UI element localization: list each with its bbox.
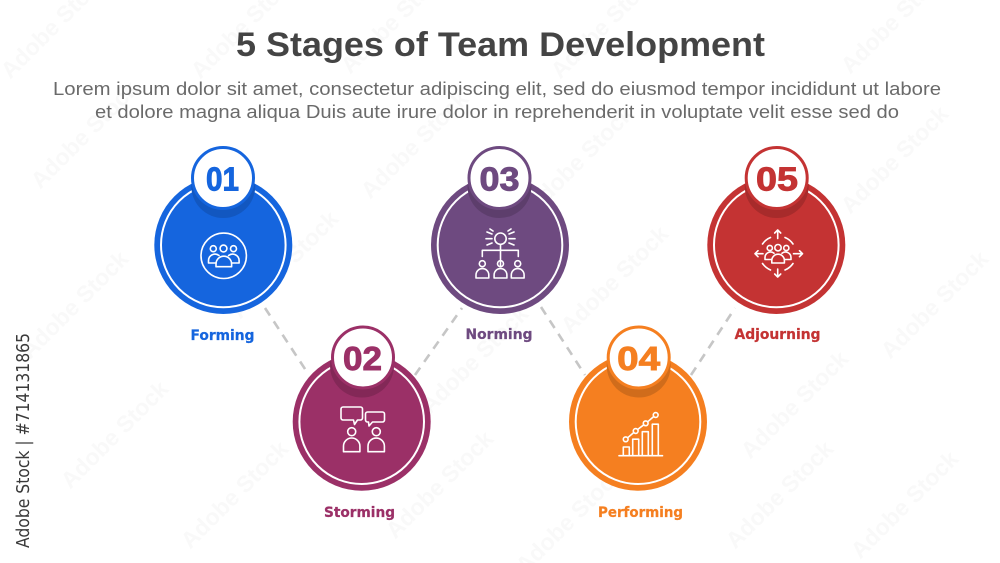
label: adjourning: Adjourning xyxy=(734,327,820,343)
stage 4: performing xyxy=(569,327,707,521)
background watermark: Adobe Stock xyxy=(845,445,963,563)
icon: leader and team hierarchy xyxy=(476,229,524,278)
icon: team in circle xyxy=(201,233,246,278)
stage 4: performing: 04 xyxy=(617,340,661,377)
stage 3: norming: 03 xyxy=(480,160,520,198)
label: storming: Storming xyxy=(324,505,395,521)
background watermark: Adobe Stock xyxy=(15,245,133,363)
label: norming: Norming xyxy=(466,327,532,343)
icon: team with outward arrows xyxy=(755,230,802,277)
background watermark: Adobe Stock xyxy=(225,205,343,323)
title: 5 Stages of Team Development xyxy=(236,26,765,64)
background watermark: Adobe Stock xyxy=(175,435,293,553)
stage 5: adjourning: 05 xyxy=(756,160,798,198)
stock credit: Adobe Stock | #714131865 xyxy=(13,333,34,548)
background watermark: Adobe Stock xyxy=(735,345,853,463)
background watermark: Adobe Stock xyxy=(380,425,498,543)
background watermark: Adobe Stock xyxy=(720,435,838,553)
stage 2: storming xyxy=(293,327,431,521)
background watermark: Adobe Stock xyxy=(520,100,638,218)
dashed connectors xyxy=(265,307,735,375)
background watermark: Adobe Stock xyxy=(55,375,173,493)
subtitle: Lorem ipsum dolor sit amet, consectetur adipiscing elit, sed do eiusmod tempor incididunt ut labore xyxy=(53,79,941,99)
stage 2: storming: 02 xyxy=(343,340,382,377)
icon: two people talking xyxy=(341,407,384,452)
background watermark: Adobe Stock xyxy=(875,245,993,363)
stage 3: norming xyxy=(431,148,569,343)
background watermark: Adobe Stock xyxy=(835,100,953,218)
subtitle: et dolore magna aliqua Duis aute irure dolor in reprehenderit in voluptate velit esse sed do xyxy=(95,102,899,122)
background watermark: Adobe Stock xyxy=(355,85,473,203)
subtitle xyxy=(53,79,941,122)
background watermark: Adobe Stock xyxy=(555,220,673,338)
label: performing: Performing xyxy=(598,505,683,521)
background watermark: Adobe Stock xyxy=(415,300,533,418)
icon: rising bar chart xyxy=(619,413,662,456)
label: forming: Forming xyxy=(190,328,254,344)
stage 1: forming xyxy=(154,148,292,344)
stage 5: adjourning xyxy=(707,148,845,343)
background watermark: Adobe Stock xyxy=(25,75,143,193)
stage 1: forming: 01 xyxy=(206,160,239,198)
